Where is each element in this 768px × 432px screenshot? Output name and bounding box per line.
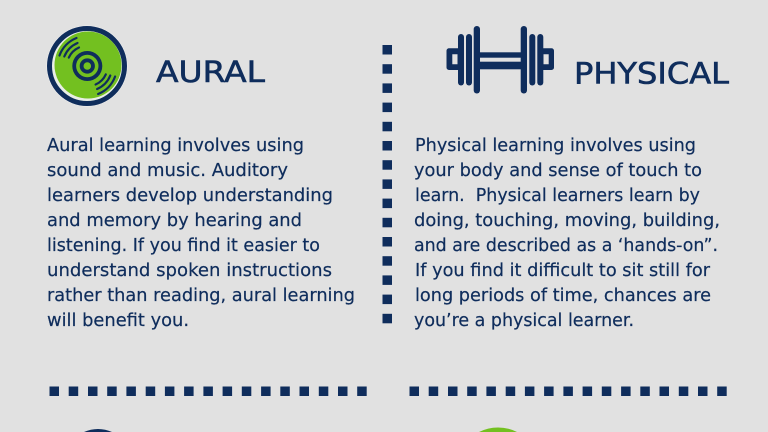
text block: aural description: sound and music. Auditory	[47, 161, 288, 181]
icon: navy circle cropped at bottom edge	[84, 429, 112, 432]
text block: physical description: long periods of time, chances are	[415, 286, 711, 306]
text block: physical description: your body and sense of touch to	[414, 161, 702, 181]
text block: aural description: Aural learning involves using	[47, 136, 304, 156]
text block: physical description: and are described as a ‘hands-on”.	[414, 236, 718, 256]
text block: aural description	[47, 136, 355, 331]
heading: physical: PHYSICAL	[574, 56, 729, 90]
horizontal dotted divider: right	[410, 386, 727, 396]
text block: physical description	[414, 136, 720, 331]
icon: vinyl record	[46, 26, 128, 106]
text block: aural description: and memory by hearing and	[47, 211, 302, 231]
text block: aural description: rather than reading, aural learning	[47, 286, 355, 306]
text block: aural description: will benefit you.	[47, 311, 189, 331]
text block: physical description: Physical learning involves using	[415, 136, 696, 156]
icon: barbell	[446, 26, 554, 94]
heading: aural: AURAL	[156, 55, 265, 89]
text block: physical description: doing, touching, moving, building,	[414, 211, 720, 231]
horizontal dotted divider: left	[50, 386, 367, 396]
text block: physical description: If you find it difficult to sit still for	[415, 261, 711, 281]
text block: physical description: learn. Physical learners learn by	[415, 186, 700, 206]
vertical dotted divider	[382, 45, 392, 323]
text block: aural description: listening. If you find it easier to	[47, 236, 320, 256]
panel: aural	[46, 26, 355, 331]
text block: physical description: you’re a physical learner.	[414, 311, 634, 331]
text block: aural description: understand spoken instructions	[47, 261, 332, 281]
text block: aural description: learners develop understanding	[47, 186, 333, 206]
panel: physical	[414, 26, 729, 331]
icon: green circle cropped at bottom edge	[479, 427, 517, 432]
